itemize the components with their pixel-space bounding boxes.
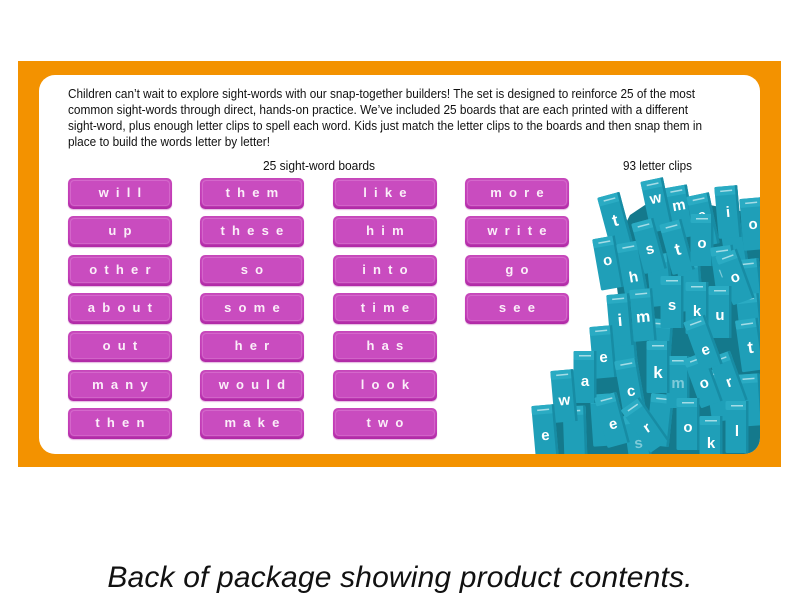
letter clips pile: s — [644, 240, 656, 259]
panel: white content card: him — [366, 223, 411, 238]
panel: white content card: about — [88, 300, 159, 315]
panel: white content card: into — [362, 262, 415, 277]
letter clips pile: u — [715, 307, 725, 324]
letter clips pile: e — [607, 415, 619, 434]
word boards column 2 — [200, 178, 304, 440]
panel: white content card: out — [103, 338, 144, 353]
panel: white content card: write — [487, 223, 554, 238]
panel: white content card: two — [366, 415, 410, 430]
letter clips pile: m — [671, 196, 687, 215]
letter clips pile: o — [602, 251, 614, 270]
letter clips pile: t — [610, 210, 621, 230]
letter clips pile: e — [540, 427, 550, 444]
intro text block: Children can’t wait to explore sight-words with our snap-together builders! The set is designed to reinforce 25 of the most — [68, 87, 695, 101]
word boards column 3 — [332, 178, 438, 440]
letter clips pile: w — [717, 263, 732, 282]
letter clips pile: o — [697, 374, 711, 393]
letter clips pile: m — [635, 308, 651, 327]
letter clips pile: h — [628, 268, 640, 287]
letter clips pile: e — [696, 206, 708, 225]
letter clips pile: t — [746, 338, 755, 357]
panel: white content card: these — [221, 223, 290, 238]
word boards column 1 — [68, 178, 172, 440]
letter clips pile: i — [725, 204, 731, 221]
letter clips pile: w — [557, 391, 571, 410]
panel: white content card: then — [95, 415, 152, 430]
letter clips pile: r — [640, 419, 654, 437]
letter clips pile: k — [653, 363, 663, 382]
intro text block: 25 sight-word boards — [263, 159, 375, 173]
letter clips pile: o — [683, 419, 693, 436]
letter clips pile: a — [581, 373, 590, 390]
panel: white content card: make — [224, 415, 287, 430]
letter clips pile: r — [724, 373, 735, 391]
letter clips pile: o — [748, 216, 758, 233]
panel: white content card: so — [241, 262, 270, 277]
panel: white content card: go — [505, 262, 536, 277]
intro text block: sight-word, plus enough letter clips to spell each word. Kids just match the letter clips to the boards and then snap them in — [68, 119, 702, 133]
panel: white content card: many — [92, 377, 155, 392]
panel: white content card: has — [366, 338, 410, 353]
letter clips pile: s — [633, 434, 644, 452]
panel: white content card: some — [224, 300, 287, 315]
letter clips pile: k — [693, 303, 702, 320]
panel: white content card: would — [219, 377, 292, 392]
letter clips pile: i — [617, 311, 623, 330]
letter clips pile: s — [668, 297, 676, 314]
panel: white content card — [39, 75, 760, 454]
intro text block: place to build the words letter by letter! — [68, 135, 270, 149]
panel: white content card: see — [499, 300, 542, 315]
panel: white content card: like — [363, 185, 414, 200]
caption: Back of package showing product contents. — [107, 561, 693, 594]
intro text block: 93 letter clips — [623, 159, 692, 173]
panel: white content card: them — [226, 185, 285, 200]
letter clips pile: m — [671, 375, 685, 392]
letter clips pile: e — [599, 349, 608, 366]
letter clips pile: w — [647, 189, 663, 208]
intro text block — [68, 87, 702, 173]
panel: white content card: up — [108, 223, 139, 238]
panel: white content card: look — [361, 377, 416, 392]
panel: orange package back — [18, 61, 781, 467]
panel: white content card: time — [361, 300, 416, 315]
letter clips pile: o — [697, 235, 707, 252]
letter clips pile: c — [626, 382, 637, 400]
word boards column 4 — [464, 178, 570, 326]
panel: white content card: her — [235, 338, 276, 353]
letter clips pile: k — [707, 435, 716, 452]
letter clips pile: t — [672, 239, 683, 259]
intro text block: common sight-words through direct, hands-on practice. We’ve included 25 boards that are each printed with a different — [68, 103, 688, 117]
panel: white content card: more — [490, 185, 551, 200]
letter clips pile: l — [735, 423, 739, 440]
letter clips pile: e — [699, 341, 712, 359]
letter clips pile: o — [728, 268, 742, 287]
panel: white content card: other — [89, 262, 158, 277]
panel: white content card: will — [99, 185, 148, 200]
